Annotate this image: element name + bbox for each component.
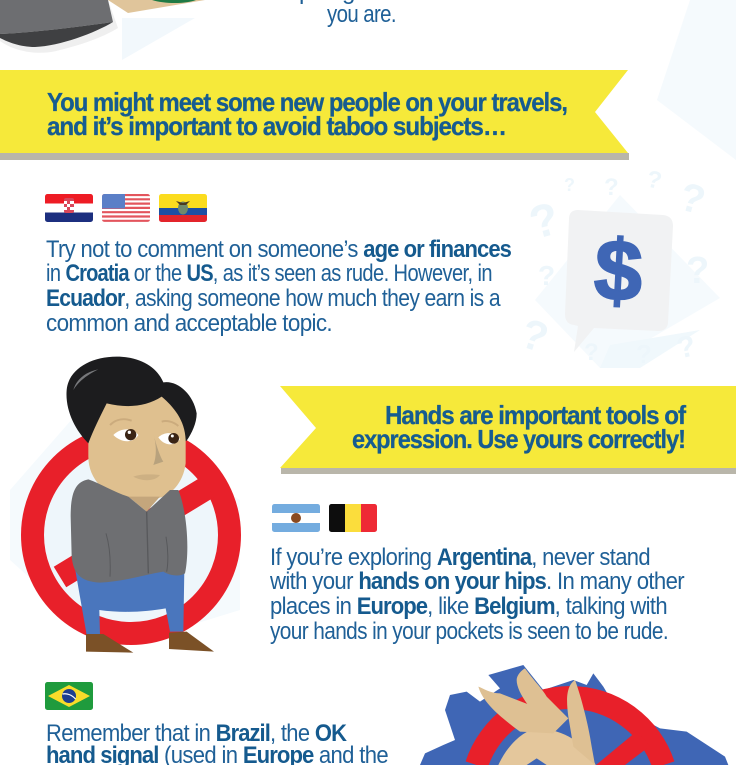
text: age or finances: Try not to comment on someone’s age or finances [46,236,512,263]
illustration: OK hand on Brazil map with prohibition sign [420,665,728,765]
flag: Belgium [329,504,377,532]
flag: Argentina [272,504,320,532]
icon: dollar speech bubble with question marks: ? [636,339,652,369]
text: end of previous paragraph [299,0,396,28]
text: age or finances: common and acceptable topic. [46,310,332,337]
banner: hands heading: Hands are important tools of [385,400,686,430]
text: OK hand signal [46,720,388,765]
illustration: sleeve and hand cropped at top [0,0,205,53]
text: OK hand signal: Remember that in Brazil, the OK [46,720,348,747]
text: age or finances: in Croatia or the US, as it’s seen as rude. However, in [46,260,492,287]
text: hands on hips: If you’re exploring Argentina, never stand [270,544,650,571]
flag: USA [102,194,150,222]
icon: dollar speech bubble with question marks: ? [584,339,599,366]
flags: Croatia, US, Ecuador [45,194,207,222]
text: age or finances: Ecuador, asking someone how much they earn is a [46,285,501,312]
banner: hands heading: expression. Use yours correctly! [352,424,685,454]
text: hands on hips [269,544,685,645]
icon: dollar speech bubble with question marks: ? [564,175,575,195]
icon: dollar speech bubble with question marks: $ [592,222,645,320]
flag: Brazil [45,682,93,710]
banner: hands heading [280,386,736,474]
text: hands on hips: your hands in your pockets is seen to be rude. [270,618,668,645]
icon: dollar speech bubble with question marks: ? [686,250,709,292]
illustration: man with hands in pockets on prohibition sign [10,357,240,653]
icon: dollar speech bubble with question marks [515,166,720,369]
text: end of previous paragraph: you are. [327,1,396,28]
icon: dollar speech bubble with question marks: ? [644,166,664,195]
text: hands on hips: with your hands on your hips. In many other [269,568,685,595]
banner: taboo subjects heading [0,70,629,160]
text: hands on hips: places in Europe, like Belgium, talking with [270,593,667,620]
flag: Ecuador [159,194,207,222]
icon: dollar speech bubble with question marks: ? [524,191,564,249]
icon: dollar speech bubble with question marks: ? [538,260,555,291]
text: age or finances [46,236,512,337]
flags: Argentina, Belgium [272,504,377,532]
icon: dollar speech bubble with question marks: ? [515,309,554,362]
banner: taboo subjects heading: and it’s important to avoid taboo subjects… [47,111,506,141]
banner: taboo subjects heading: You might meet some new people on your travels, [47,87,567,117]
icon: dollar speech bubble with question marks: ? [674,329,699,365]
icon: dollar speech bubble with question marks: ? [675,175,710,224]
icon: dollar speech bubble with question marks: ? [604,174,619,201]
flag: Croatia [45,194,93,222]
